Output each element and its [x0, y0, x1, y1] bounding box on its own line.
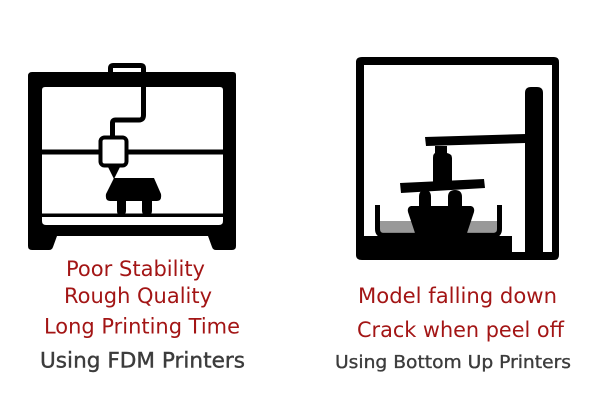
left problems text: [44, 257, 240, 340]
print head: [100, 138, 126, 166]
Long Printing Time: Long Printing Time: [44, 314, 240, 340]
resin: [380, 221, 498, 232]
gantry rail: [42, 150, 223, 154]
Rough Quality: Rough Quality: [64, 284, 212, 309]
Crack when peel off: Crack when peel off: [357, 318, 565, 343]
build platform: [400, 179, 485, 193]
model: [408, 190, 474, 236]
Poor Stability: Poor Stability: [66, 257, 205, 282]
printer frame: [28, 72, 236, 250]
filament tube: [110, 66, 144, 138]
icon: FDM printer: [28, 66, 236, 250]
nozzle: [108, 167, 120, 179]
Model falling down: Model falling down: [358, 284, 557, 309]
icon: bottom up printer: [356, 57, 559, 260]
build plate: [42, 214, 223, 217]
z-axis connector: [433, 146, 452, 182]
left caption: Using FDM Printers: [40, 348, 245, 374]
right caption: Using Bottom Up Printers: [335, 352, 571, 373]
column: [525, 87, 543, 252]
printed model: [106, 178, 161, 215]
right problems text: [357, 284, 565, 343]
base platform: [364, 236, 512, 252]
vat: [378, 205, 500, 235]
printer frame: [356, 57, 559, 260]
arm: [425, 134, 526, 146]
